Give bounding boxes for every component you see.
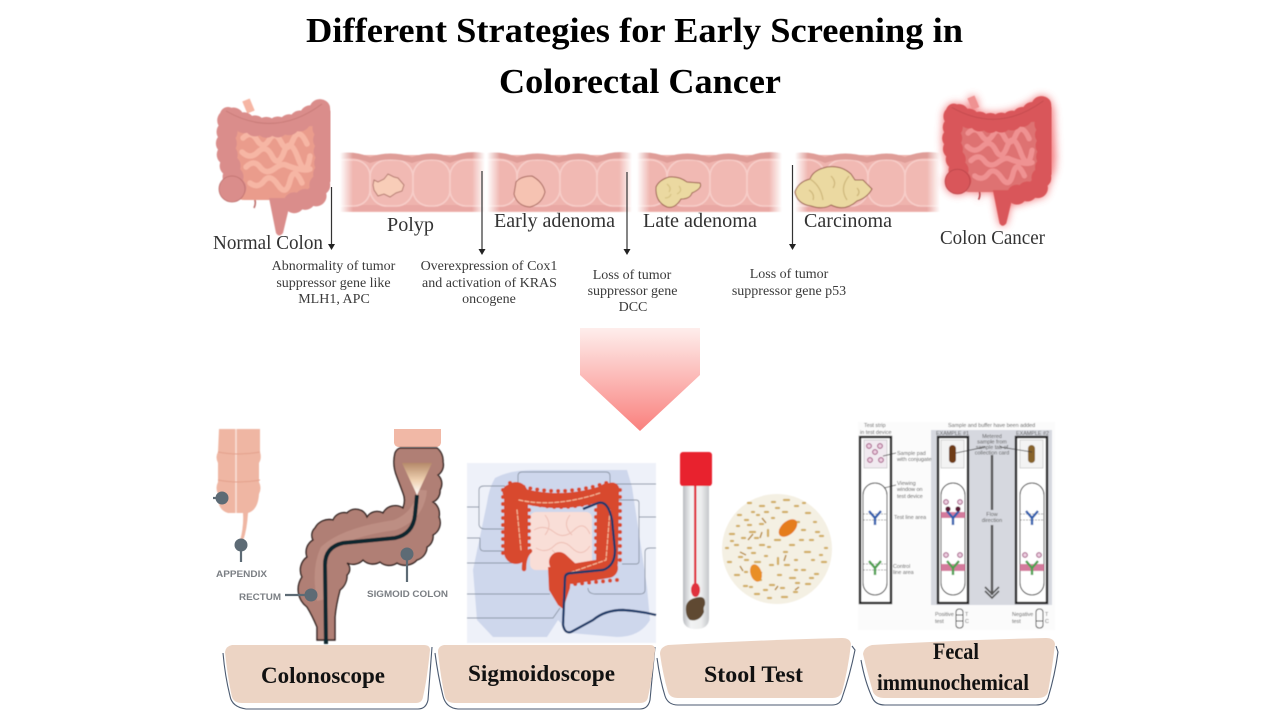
button: sigmoidoscope: Sigmoidoscope — [468, 661, 615, 686]
diagram captions: EXAMPLE #1 — [936, 431, 969, 437]
label: appendix: APPENDIX — [216, 569, 268, 580]
text: mutation 3: Loss of tumor — [593, 268, 672, 283]
diagram captions: sample tab of — [976, 445, 1009, 451]
button: stool test — [657, 638, 855, 705]
label leader lines — [467, 472, 656, 618]
panel: colon cancer progression — [213, 97, 1046, 315]
diagram captions: direction — [982, 518, 1002, 524]
upper colon section — [394, 429, 441, 447]
button: fecal immunochemical — [861, 638, 1058, 705]
diagram captions: Test strip — [864, 423, 886, 429]
diagram captions: in test device — [860, 430, 891, 436]
microscope view — [722, 494, 832, 604]
pin: appendix marker — [213, 492, 247, 562]
small intestine — [530, 512, 592, 570]
arrow: early to late adenoma — [624, 172, 630, 255]
diagram captions: test device — [897, 494, 923, 500]
pointer lines — [883, 447, 1032, 488]
label: carcinoma: Carcinoma — [804, 210, 892, 232]
sample stick — [691, 486, 700, 597]
flow arrow — [985, 455, 999, 598]
panel: sigmoidoscope illustration — [467, 463, 656, 643]
light background — [858, 422, 1055, 630]
label: sigmoid colon: SIGMOID COLON — [367, 589, 448, 600]
strip: example 1 — [938, 437, 968, 603]
arrow: polyp to early adenoma — [478, 171, 486, 255]
tube — [683, 484, 709, 629]
label: late adenoma: Late adenoma — [643, 210, 757, 232]
diagram captions: C — [1045, 619, 1049, 625]
colon strip: polyp — [320, 150, 500, 214]
button: colonoscope — [223, 645, 432, 709]
diagram captions: line area — [893, 570, 914, 576]
text: mutation 1: MLH1, APC — [298, 292, 370, 307]
diagram captions: Positive — [935, 612, 954, 618]
body silhouette — [473, 470, 650, 637]
colon strip: carcinoma — [775, 150, 955, 214]
title: Colorectal Cancer — [499, 62, 781, 101]
text: mutation 2: oncogene — [462, 292, 516, 307]
pin: rectum marker — [285, 589, 317, 601]
diagram captions: Sample pad — [897, 451, 926, 457]
label: early adenoma: Early adenoma — [494, 210, 615, 232]
grey example area — [931, 430, 1052, 605]
strip: example 2 — [1016, 437, 1047, 603]
diagram captions: T — [1045, 612, 1049, 618]
appendix colon — [216, 429, 261, 541]
mini result strips — [956, 609, 1043, 628]
text: mutation 4: suppressor gene p53 — [732, 284, 846, 299]
diagram captions: Viewing — [897, 481, 916, 487]
label: rectum: RECTUM — [239, 592, 281, 603]
arrow: large down arrow — [580, 328, 700, 431]
text: mutation 3: DCC — [619, 300, 647, 315]
diagram captions: test — [1012, 619, 1021, 625]
panel: stool test illustration — [680, 452, 832, 629]
diagram captions: T — [965, 612, 969, 618]
diagram captions: window on — [896, 487, 922, 493]
strip: test device — [860, 437, 891, 603]
text: mutation 4: Loss of tumor — [750, 267, 829, 282]
stool sample — [686, 597, 705, 620]
button: fecal immunochemical: immunochemical — [877, 670, 1029, 695]
diagram captions — [860, 423, 1049, 625]
pin: sigmoid colon marker — [401, 548, 413, 582]
diagram captions: Test line area — [894, 515, 926, 521]
diagram captions: sample from — [977, 440, 1007, 446]
red cap — [680, 452, 712, 486]
background — [467, 463, 656, 643]
colon strip: early adenoma — [467, 150, 647, 214]
panel: fecal immunochemical test diagram — [858, 422, 1055, 630]
diagram captions: collection card — [975, 450, 1009, 456]
icon: colon cancer — [945, 97, 1046, 226]
colon with scope — [298, 448, 443, 644]
diagram captions: test — [935, 619, 944, 625]
diagram captions: Control — [893, 564, 910, 570]
text: mutation 2: Overexpression of Cox1 — [421, 259, 557, 274]
diagram captions: Metered — [982, 434, 1002, 440]
text: mutation 3: suppressor gene — [588, 284, 677, 299]
label: colon cancer: Colon Cancer — [940, 227, 1045, 249]
diagram captions: Sample and buffer have been added — [948, 423, 1035, 429]
button: fecal immunochemical: Fecal — [933, 639, 979, 664]
diagram captions: Flow — [986, 512, 998, 518]
rectum tip — [548, 567, 571, 609]
text: mutation 1: suppressor gene like — [276, 276, 391, 291]
text: mutation 1: Abnormality of tumor — [272, 259, 396, 274]
title — [306, 11, 963, 101]
panel: colonoscope illustration — [213, 429, 448, 644]
diagram captions: Negative — [1012, 612, 1033, 618]
button: colonoscope: Colonoscope — [261, 663, 385, 688]
colon strip: late adenoma — [617, 150, 797, 214]
arrow: normal to polyp — [328, 187, 335, 250]
diagram captions: with conjugate — [896, 457, 931, 463]
scope cable — [563, 503, 656, 632]
label: normal colon: Normal Colon — [213, 232, 323, 254]
icon: normal colon — [219, 100, 325, 236]
colon — [503, 481, 620, 585]
diagram captions: C — [965, 619, 969, 625]
button: sigmoidoscope — [435, 645, 655, 709]
button: stool test: Stool Test — [704, 662, 803, 687]
diagram captions: EXAMPLE #2 — [1016, 431, 1049, 437]
label: polyp: Polyp — [387, 214, 434, 236]
arrow: late adenoma to carcinoma — [789, 165, 796, 250]
text: mutation 2: and activation of KRAS — [422, 276, 557, 291]
title: Different Strategies for Early Screening in — [306, 11, 963, 50]
